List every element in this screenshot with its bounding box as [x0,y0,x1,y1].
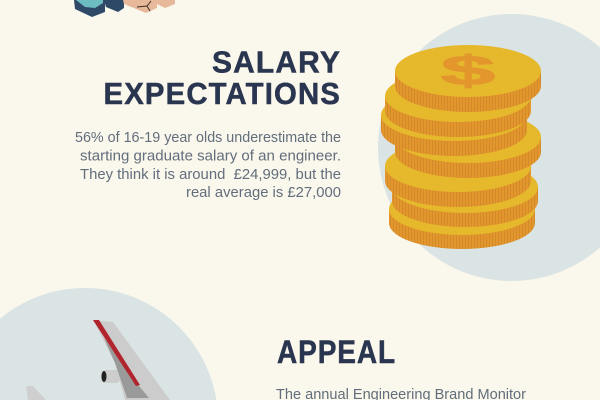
icon: airplane [26,320,170,400]
far wing [26,386,46,400]
red stripe [93,320,140,386]
coin 2 [385,70,531,137]
icon: shoes cropped at top [74,0,175,17]
coin 4 [395,111,541,178]
salary circle background [378,14,600,281]
text block: salary body [75,130,341,201]
heading: salary expectations: EXPECTATIONS [104,76,341,111]
coin 1 with dollar sign [395,45,541,112]
icon: coin stack [381,45,541,249]
text block: salary body: 56% of 16-19 year olds underestimate the [75,130,341,146]
coin 1 with dollar sign: $ [441,47,495,94]
heading: salary expectations: SALARY [212,44,341,80]
coin 7 [389,183,535,249]
text block: salary body: starting graduate salary of an engineer. [80,148,341,164]
appeal circle background [0,288,218,400]
text block: salary body: real average is £27,000 [186,185,341,201]
coin 6 [392,161,538,227]
engine [101,370,120,383]
coin 3 [381,89,527,156]
text block: salary body: They think it is around £24,999, but the [80,167,341,183]
heading: appeal: APPEAL [277,334,396,370]
wing shadow [104,338,149,398]
coin 5 [385,140,531,207]
heading: salary expectations [104,44,341,111]
main wing [93,320,170,400]
